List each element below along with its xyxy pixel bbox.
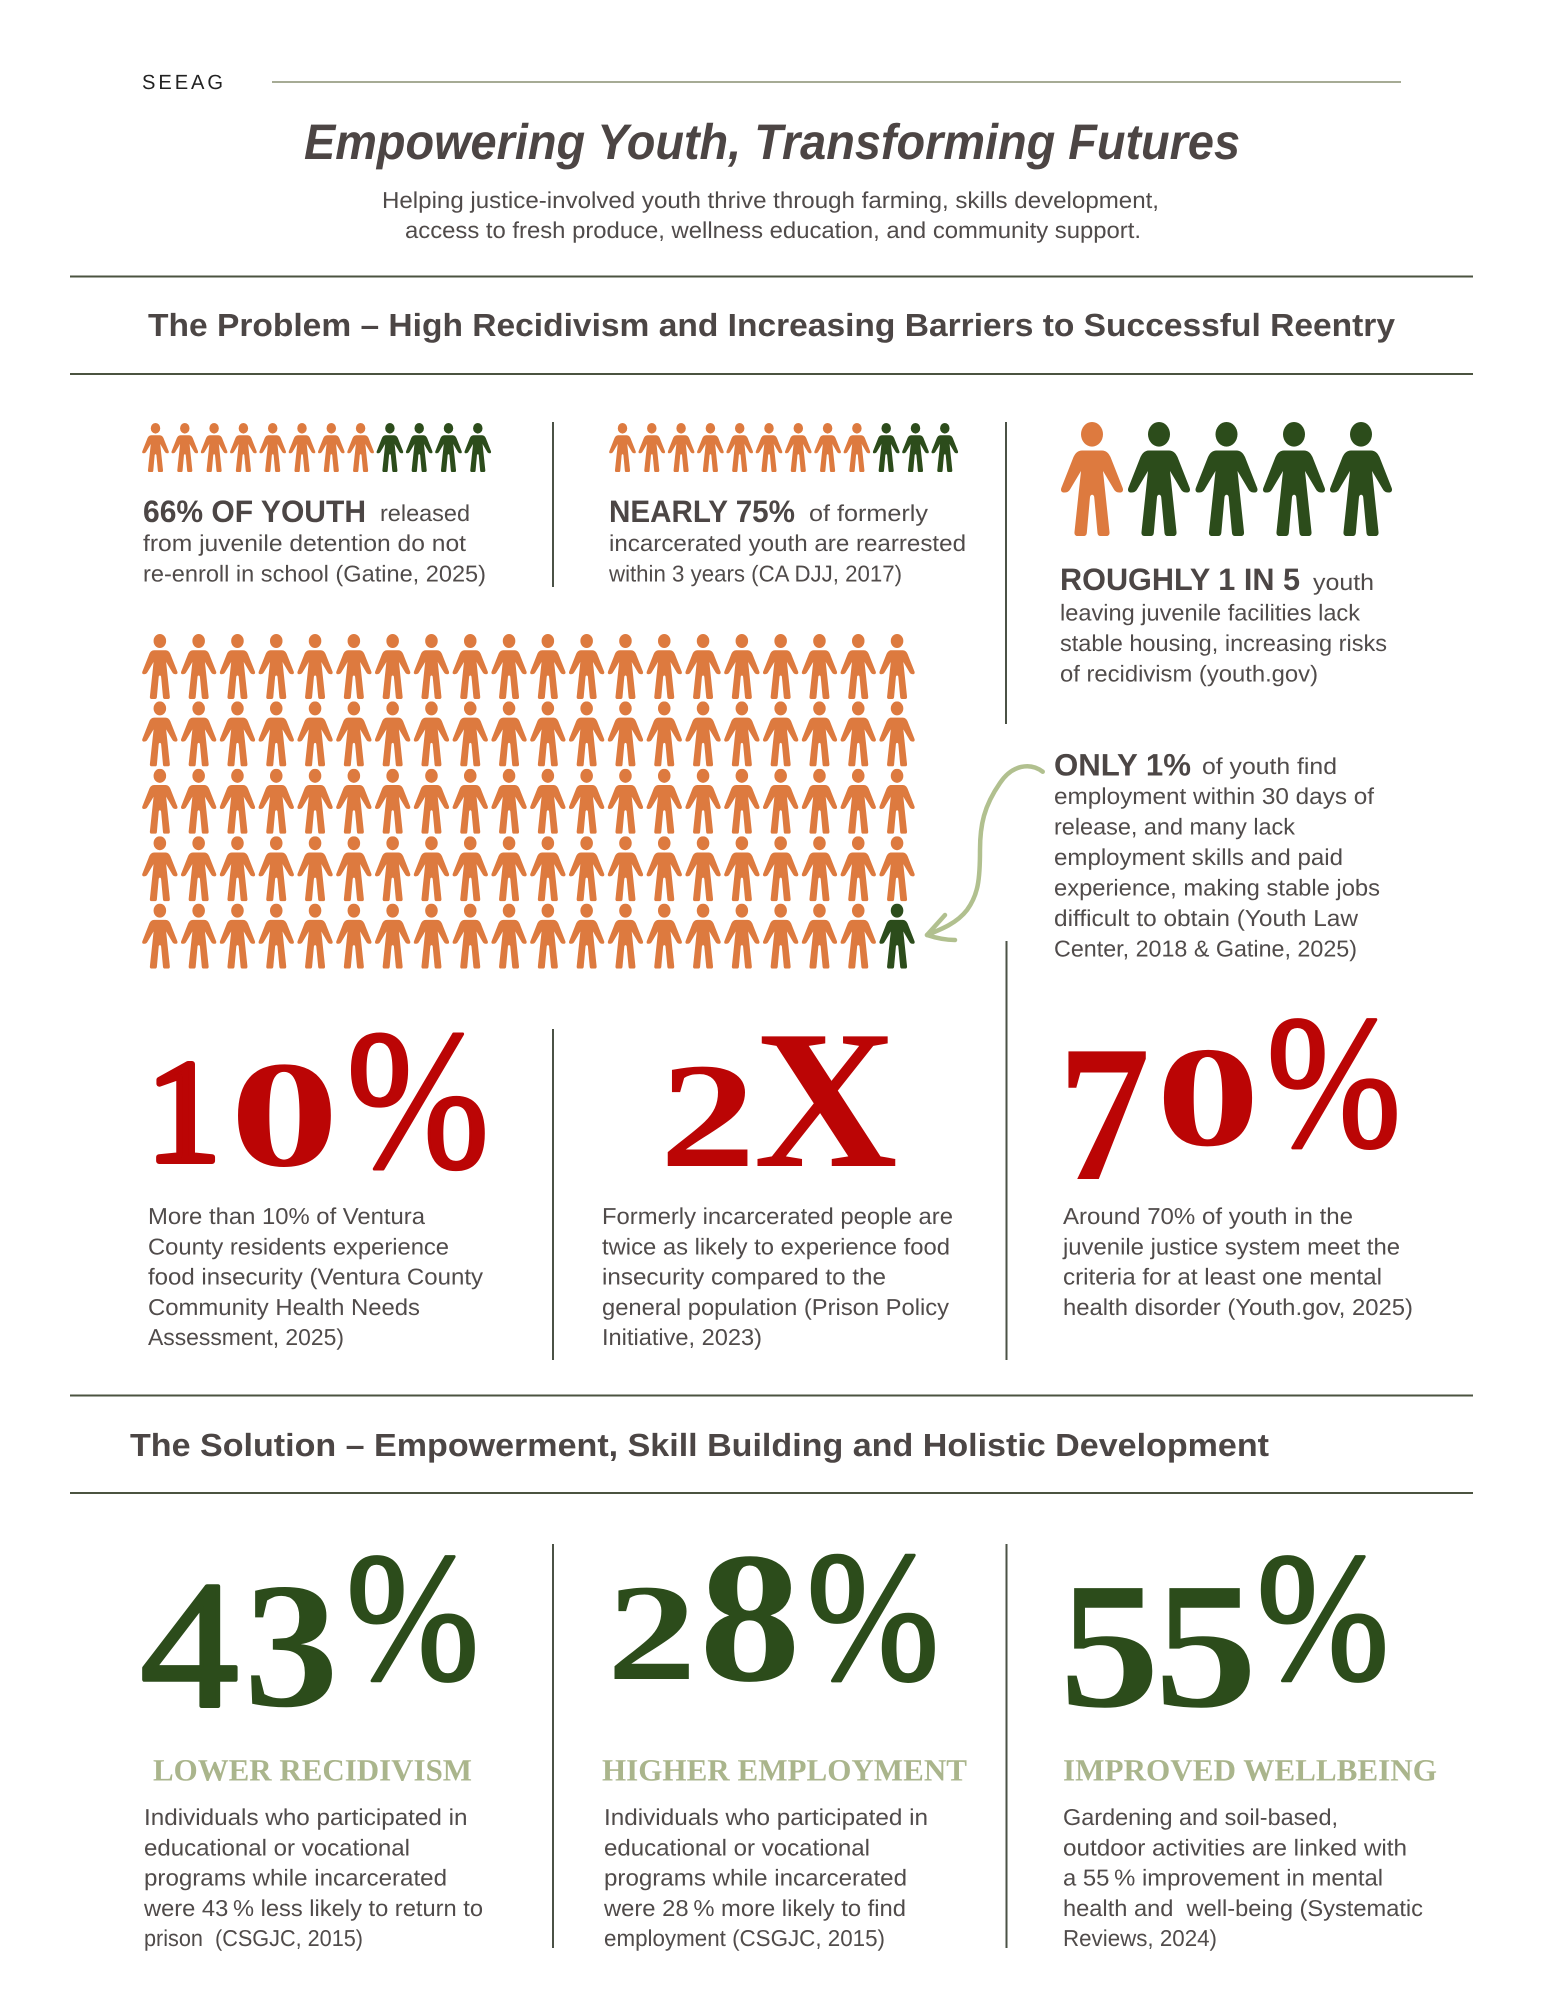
text: nearly 75% — [608, 494, 966, 586]
subtitle: access to fresh produce, wellness education, and community support. — [405, 217, 1141, 243]
text: 2X: twice as likely to experience food — [602, 1233, 950, 1259]
text: 70%: Around 70% of youth in the — [1063, 1203, 1353, 1229]
label: improved wellbeing: IMPROVED WELLBEING — [1063, 1752, 1437, 1788]
text: improved wellbeing: Gardening and soil-based, — [1063, 1804, 1338, 1830]
text: roughly 1 in 5: leaving juvenile facilities lack — [1060, 600, 1361, 626]
text: nearly 75%: of formerly — [809, 500, 929, 526]
callout: only 1%: of youth find — [1202, 753, 1337, 779]
text: lower recidivism: were 43 % less likely to return to — [143, 1895, 483, 1921]
big number: 28% — [607, 1514, 939, 1721]
solution: lower recidivism — [140, 1515, 483, 1951]
text: improved wellbeing — [1063, 1804, 1423, 1951]
panel: 66% of youth — [142, 423, 491, 586]
text: roughly 1 in 5: of recidivism (youth.gov) — [1060, 660, 1318, 686]
big number: 70%: 7 — [1058, 1006, 1150, 1222]
subtitle — [382, 187, 1159, 243]
stat: 2X — [602, 990, 953, 1350]
callout: only 1%: employment skills and paid — [1054, 844, 1343, 870]
big number: 55%: 5 — [1060, 1546, 1160, 1745]
text: roughly 1 in 5 — [1060, 562, 1387, 686]
big number: 28%: 8 — [699, 1515, 801, 1721]
big number: 2X — [660, 990, 898, 1209]
big number: 10%: 0 — [230, 1030, 339, 1198]
text: lower recidivism: Individuals who participated in — [144, 1804, 468, 1830]
heading: the solution: The Solution – Empowerment, Skill Building and Holistic Development — [130, 1427, 1269, 1463]
text: nearly 75%: within 3 years (CA DJJ, 2017) — [608, 560, 902, 586]
text: 10%: County residents experience — [148, 1233, 449, 1259]
text: 2X: Initiative, 2023) — [602, 1324, 762, 1350]
callout: only 1%: difficult to obtain (Youth Law — [1054, 905, 1358, 931]
text: roughly 1 in 5: stable housing, increasing risks — [1060, 630, 1387, 656]
text: improved wellbeing: outdoor activities are linked with — [1063, 1834, 1407, 1860]
text: 2X: Formerly incarcerated people are — [602, 1203, 953, 1229]
text: higher employment — [603, 1804, 928, 1951]
callout: only 1%: experience, making stable jobs — [1054, 874, 1380, 900]
text: 66% of youth: released — [380, 500, 470, 526]
text: 10%: More than 10% of Ventura — [148, 1203, 425, 1229]
text: higher employment: were 28 % more likely to find — [603, 1895, 906, 1921]
icon row: 9 of 12 people — [609, 423, 958, 472]
big number: 10%: 1 — [146, 1030, 221, 1193]
label: higher employment: HIGHER EMPLOYMENT — [602, 1752, 967, 1788]
callout: only 1%: ONLY 1% — [1054, 748, 1191, 782]
stat: 70% — [1058, 978, 1413, 1320]
text: higher employment: programs while incarcerated — [604, 1865, 907, 1891]
subtitle: Helping justice-involved youth thrive through farming, skills development, — [382, 187, 1159, 213]
text: improved wellbeing: a 55 % improvement in mental — [1063, 1865, 1383, 1891]
text: higher employment: educational or vocational — [604, 1834, 870, 1860]
text: lower recidivism — [143, 1804, 483, 1951]
text: lower recidivism: educational or vocational — [144, 1834, 410, 1860]
icon row: 8 of 12 people — [142, 423, 491, 472]
label: lower recidivism: LOWER RECIDIVISM — [153, 1752, 472, 1788]
callout: only 1%: release, and many lack — [1054, 814, 1296, 840]
text: 2X: general population (Prison Policy — [602, 1294, 950, 1320]
big number: 10%: % — [346, 990, 489, 1211]
text: 10%: Community Health Needs — [148, 1294, 420, 1320]
panel: nearly 75% — [608, 423, 966, 586]
big number: 28%: 2 — [607, 1556, 696, 1709]
solution: improved wellbeing — [1060, 1515, 1437, 1951]
title: Empowering Youth, Transforming Futures — [304, 114, 1240, 170]
text: 10%: food insecurity (Ventura County — [148, 1264, 484, 1290]
big number: 43%: 3 — [244, 1546, 338, 1744]
text: 66% of youth: from juvenile detention do not — [143, 530, 467, 556]
callout: only 1%: Center, 2018 & Gatine, 2025) — [1054, 936, 1357, 962]
big number: 43%: % — [346, 1515, 479, 1719]
text: improved wellbeing: Reviews, 2024) — [1063, 1925, 1217, 1951]
text: roughly 1 in 5: youth — [1313, 569, 1374, 595]
big number: 70%: % — [1267, 978, 1401, 1188]
heading: the problem: The Problem – High Recidivism and Increasing Barriers to Successful Reentry — [148, 307, 1395, 343]
text: 70%: criteria for at least one mental — [1063, 1264, 1382, 1290]
text: higher employment: employment (CSGJC, 2015) — [604, 1925, 885, 1951]
big number: 55%: % — [1257, 1515, 1389, 1719]
callout: only 1%: employment within 30 days of — [1054, 783, 1375, 809]
text: lower recidivism: programs while incarcerated — [144, 1865, 447, 1891]
arrow: from callout to green figure — [927, 766, 1043, 940]
pictogram: 1 in 100 youth — [142, 634, 915, 969]
big number: 70%: 0 — [1156, 1018, 1260, 1176]
big number: 28%: % — [807, 1514, 939, 1720]
big number: 10% — [146, 990, 489, 1211]
text: 70% — [1062, 1203, 1413, 1320]
icon row: 1 of 5 people — [1061, 422, 1392, 536]
big number: 43% — [140, 1515, 479, 1746]
stat: 10% — [146, 990, 489, 1350]
text: nearly 75%: NEARLY 75% — [609, 494, 795, 529]
text: 10% — [148, 1203, 484, 1350]
text: 2X — [602, 1203, 953, 1350]
panel: roughly 1 in 5 — [1060, 422, 1392, 686]
solution: higher employment — [602, 1514, 967, 1951]
text: improved wellbeing: health and well-being (Systematic — [1063, 1895, 1423, 1921]
text: roughly 1 in 5: ROUGHLY 1 IN 5 — [1060, 562, 1300, 597]
text: higher employment: Individuals who participated in — [604, 1804, 928, 1830]
big number: 70% — [1058, 978, 1401, 1222]
big number: 55% — [1060, 1515, 1389, 1745]
text: 66% of youth: 66% OF YOUTH — [143, 494, 366, 529]
text: nearly 75%: incarcerated youth are rearrested — [609, 530, 966, 556]
text: lower recidivism: prison (CSGJC, 2015) — [144, 1925, 363, 1951]
callout: only 1% — [1054, 748, 1380, 962]
big number: 55%: 5 — [1154, 1546, 1257, 1745]
big number: 2X: X — [754, 990, 898, 1209]
text: 70%: health disorder (Youth.gov, 2025) — [1063, 1294, 1413, 1320]
big number: 2X: 2 — [660, 1033, 756, 1199]
text: 66% of youth — [143, 494, 486, 586]
text: 2X: insecurity compared to the — [602, 1264, 886, 1290]
big number: 43%: 4 — [140, 1545, 238, 1746]
text: 10%: Assessment, 2025) — [148, 1324, 344, 1350]
text: 66% of youth: re-enroll in school (Gatine, 2025) — [143, 560, 486, 586]
text: 70%: juvenile justice system meet the — [1062, 1233, 1400, 1259]
header brand: SEEAG — [142, 71, 226, 94]
